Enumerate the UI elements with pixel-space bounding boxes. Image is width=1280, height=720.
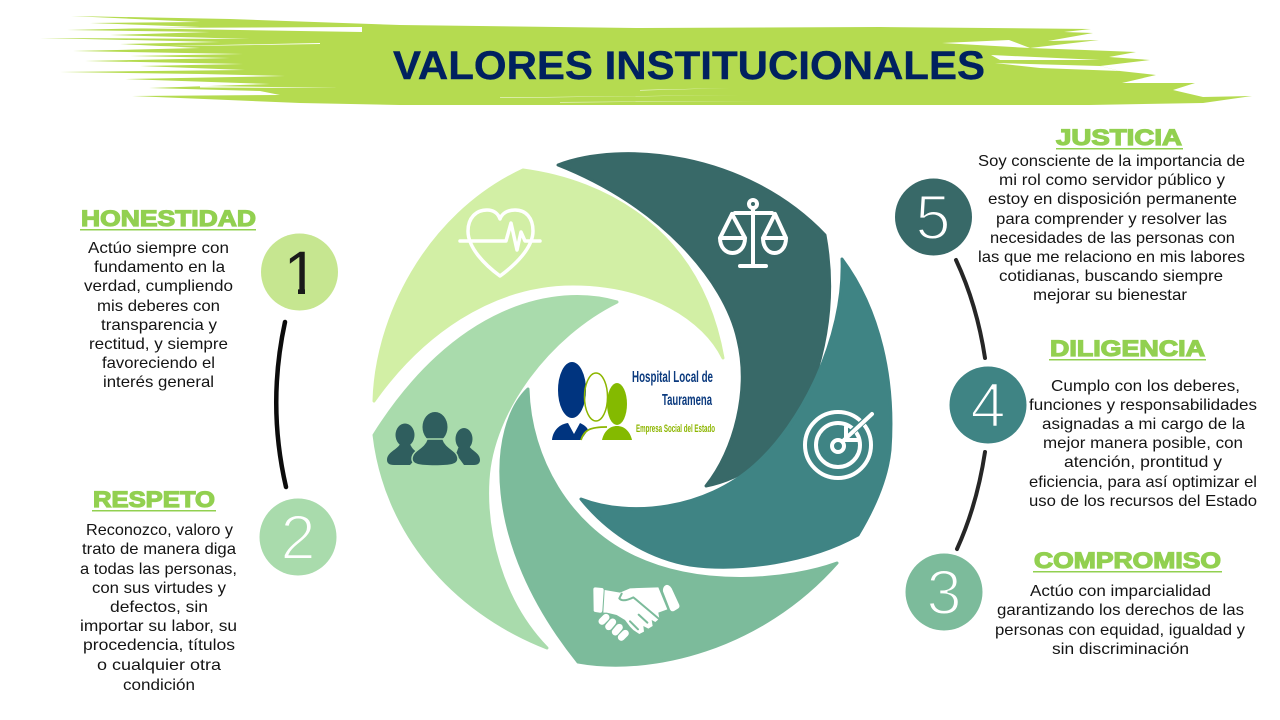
text: honestidad description: fundamento en la xyxy=(94,259,225,276)
text: diligencia description: mejor manera posible, con xyxy=(1043,435,1243,452)
text: justicia description xyxy=(978,153,1245,304)
panel: justicia xyxy=(978,125,1245,304)
cycle diagram xyxy=(374,154,891,665)
connector: 5 to 4 xyxy=(956,260,985,358)
connector: 1 to 2 xyxy=(276,322,286,487)
heading: compromiso: COMPROMISO xyxy=(1034,548,1221,573)
text: respeto description: condición xyxy=(123,677,195,694)
text: justicia description: para comprender y resolver las xyxy=(996,211,1227,228)
text: justicia description: mejorar su bienestar xyxy=(1033,287,1188,304)
number badge 5 xyxy=(895,178,972,256)
text: justicia description: mi rol como servidor público y xyxy=(999,172,1225,189)
title: VALORES INSTITUCIONALES xyxy=(393,44,985,88)
text: compromiso description xyxy=(995,583,1245,658)
logo figures xyxy=(552,362,632,440)
heading: justicia: JUSTICIA xyxy=(1056,125,1182,150)
number badge 2 xyxy=(260,498,336,576)
segment: compromiso xyxy=(501,389,837,665)
text: honestidad description: transparencia y xyxy=(101,317,217,334)
text: honestidad description: interés general xyxy=(103,374,214,391)
text: respeto description: trato de manera diga xyxy=(82,541,236,558)
text: diligencia description: asignadas a mi cargo de la xyxy=(1042,416,1245,433)
text: honestidad description: favoreciendo el xyxy=(102,355,215,372)
text: respeto description: defectos, sin xyxy=(110,599,208,616)
text: justicia description: estoy en disposición permanente xyxy=(988,191,1237,208)
text: honestidad description: rectitud, y siempre xyxy=(89,336,228,353)
text: compromiso description: Actúo con imparcialidad xyxy=(1030,583,1211,600)
text: diligencia description: funciones y responsabilidades xyxy=(1029,397,1257,414)
text: compromiso description: garantizando los derechos de las xyxy=(997,602,1244,619)
text: respeto description: importar su labor, su xyxy=(80,618,237,635)
number badge 4: 4 xyxy=(970,371,1006,441)
text: justicia description: cotidianas, buscando siempre xyxy=(999,268,1223,285)
text: diligencia description: eficiencia, para así optimizar el xyxy=(1029,474,1257,491)
text: honestidad description xyxy=(84,240,233,391)
text: diligencia description: atención, prontitud y xyxy=(1064,454,1222,471)
text: compromiso description: sin discriminación xyxy=(1052,641,1189,658)
text: respeto description xyxy=(80,522,237,694)
title banner: green brush stroke xyxy=(40,16,1252,105)
connector: 4 to 3 xyxy=(957,452,985,549)
segment: honestidad xyxy=(374,170,723,401)
hospital logo xyxy=(552,362,715,440)
segment: respeto xyxy=(374,297,617,648)
text: justicia description: las que me relaciono en mis labores xyxy=(978,249,1245,266)
text: honestidad description: Actúo siempre con xyxy=(88,240,229,257)
text: respeto description: procedencia, títulos xyxy=(83,637,235,654)
heading: honestidad: HONESTIDAD xyxy=(81,206,256,231)
logo tagline: Empresa Social del Estado xyxy=(636,423,715,435)
icon: heart with pulse xyxy=(460,210,540,276)
segment: diligencia xyxy=(581,259,891,567)
panel: respeto xyxy=(80,487,237,694)
icon: group of people xyxy=(387,412,480,466)
logo place: Tauramena xyxy=(662,392,712,409)
number badge 2: 2 xyxy=(280,503,316,573)
icon: target with arrow xyxy=(805,412,872,478)
heading: respeto: RESPETO xyxy=(93,487,215,512)
text: diligencia description: uso de los recursos del Estado xyxy=(1029,493,1257,510)
number badge 3 xyxy=(906,554,982,630)
text: compromiso description: personas con equidad, igualdad y xyxy=(995,622,1245,639)
number badge 1: 1 xyxy=(284,239,318,307)
logo name: Hospital Local de xyxy=(632,369,713,386)
segment: justicia xyxy=(558,154,830,486)
heading: diligencia: DILIGENCIA xyxy=(1050,336,1205,361)
text: honestidad description: verdad, cumpliendo xyxy=(84,278,233,295)
text: honestidad description: mis deberes con xyxy=(97,298,220,315)
text: respeto description: Reconozco, valoro y xyxy=(86,522,233,539)
icon: handshake xyxy=(593,585,679,637)
text: respeto description: a todas las personas, xyxy=(80,561,237,578)
panel: diligencia xyxy=(1029,336,1257,510)
panel: honestidad xyxy=(80,206,256,391)
number badge 1 xyxy=(261,234,338,310)
text: justicia description: necesidades de las personas con xyxy=(990,230,1235,247)
icon: scales of justice xyxy=(720,200,786,266)
text: diligencia description: Cumplo con los deberes, xyxy=(1051,378,1240,395)
number badge 5: 5 xyxy=(915,183,951,253)
number badge 3: 3 xyxy=(926,558,962,628)
text: justicia description: Soy consciente de la importancia de xyxy=(978,153,1245,170)
text: diligencia description xyxy=(1029,378,1257,510)
text: respeto description: o cualquier otra xyxy=(97,657,221,674)
panel: compromiso xyxy=(995,548,1245,658)
text: respeto description: con sus virtudes y xyxy=(92,580,226,597)
number badge 4 xyxy=(950,366,1026,444)
